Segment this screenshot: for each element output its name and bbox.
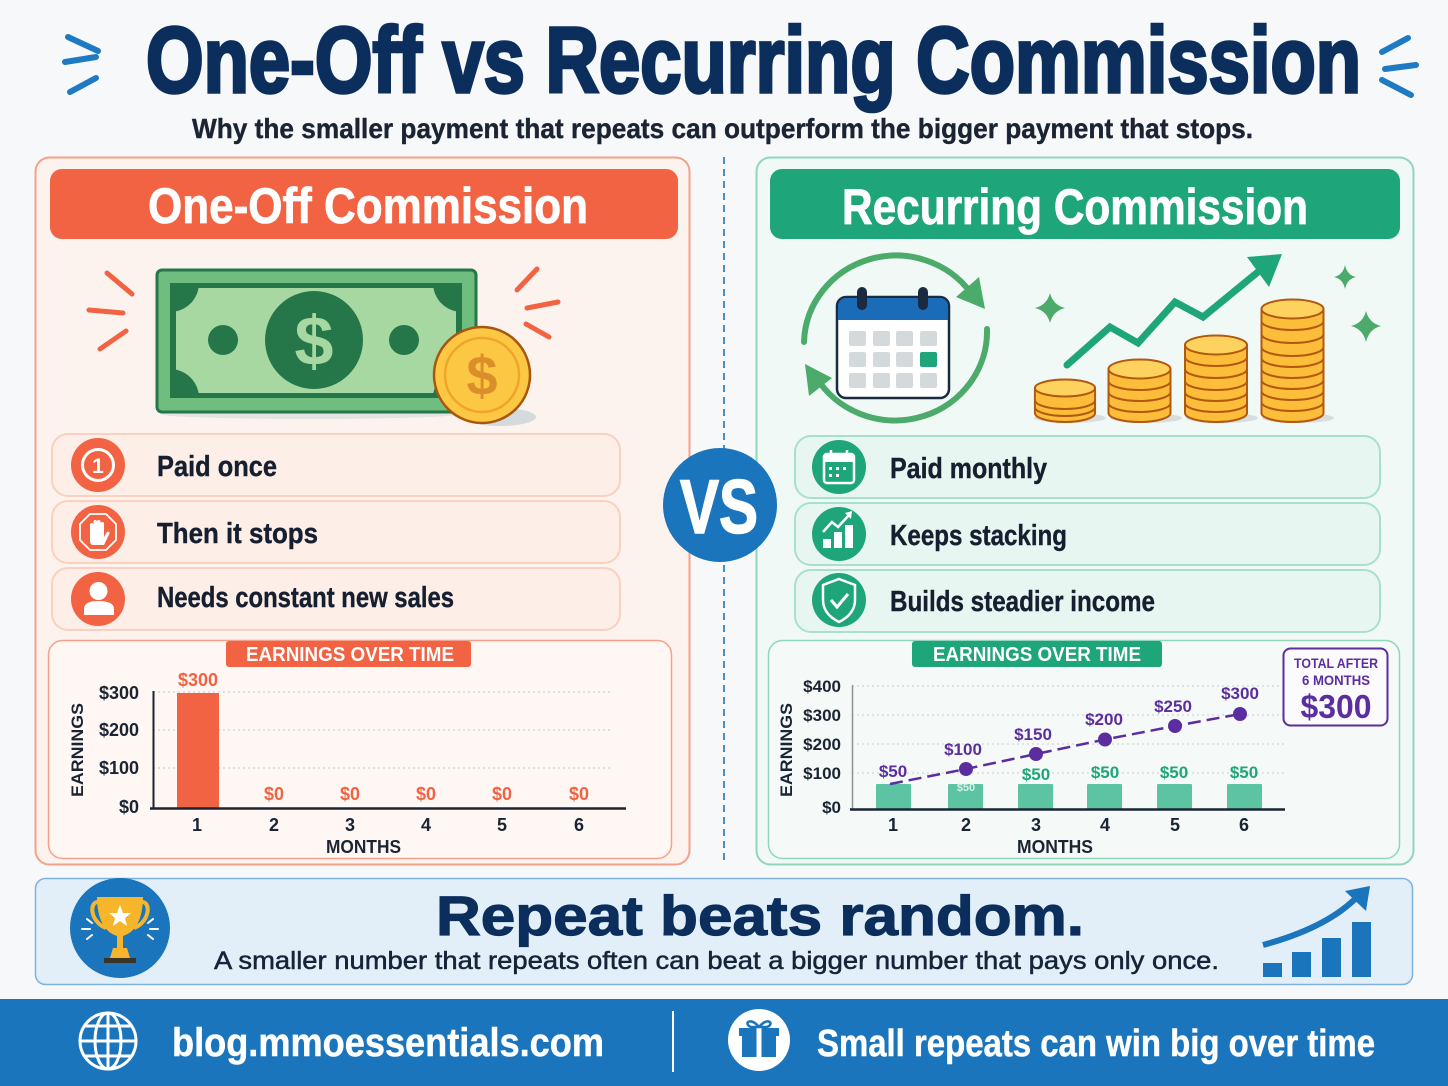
icon: number one bbox=[71, 438, 125, 492]
icon: banknote bbox=[156, 268, 478, 419]
item: then it stops: Then it stops bbox=[157, 518, 318, 550]
item: needs constant new sales: Needs constant new sales bbox=[157, 582, 454, 614]
bar chart: one-off earnings: $0 bbox=[569, 784, 589, 804]
combo chart: recurring earnings: $50 bbox=[879, 762, 907, 781]
icon: trophy bbox=[70, 878, 170, 978]
coin stack 3 bbox=[1185, 336, 1247, 422]
chart heading: EARNINGS OVER TIME bbox=[933, 644, 1141, 666]
bar chart: one-off earnings: $200 bbox=[99, 720, 139, 740]
footer tagline: Small repeats can win big over time bbox=[817, 1023, 1375, 1065]
icon: banknote: $ bbox=[295, 302, 333, 380]
combo chart: recurring earnings: $50 bbox=[1022, 765, 1050, 784]
icon: right title accent bbox=[1382, 38, 1416, 95]
icon: shield bbox=[812, 573, 866, 627]
callout: total after 6 months bbox=[1284, 648, 1388, 726]
combo chart: recurring earnings: $50 bbox=[1091, 763, 1119, 782]
bar chart: one-off earnings: $300 bbox=[99, 683, 139, 703]
icon: rays left bbox=[89, 273, 132, 349]
footer url: blog.mmoessentials.com bbox=[172, 1021, 604, 1065]
item: keeps stacking bbox=[795, 503, 1380, 565]
combo chart: recurring earnings: 1 bbox=[888, 815, 898, 835]
coin stack 4 bbox=[1262, 300, 1324, 422]
combo chart: recurring earnings: $150 bbox=[1014, 725, 1052, 744]
icon: gold coin bbox=[434, 327, 536, 426]
bar chart: one-off earnings: $0 bbox=[340, 784, 360, 804]
banner: repeat beats random bbox=[36, 878, 1412, 984]
icon: calendar bbox=[812, 440, 866, 494]
combo chart: recurring earnings bbox=[768, 640, 1400, 858]
icon: rising bars bbox=[812, 507, 866, 561]
bars bbox=[876, 784, 1262, 809]
heading: one-off commission: One-Off Commission bbox=[148, 178, 588, 234]
combo chart: recurring earnings: $250 bbox=[1154, 697, 1192, 716]
cumulative line bbox=[890, 707, 1247, 784]
panel: one-off commission bbox=[36, 158, 690, 864]
combo chart: recurring earnings: $100 bbox=[803, 764, 841, 783]
bar chart: one-off earnings: $0 bbox=[416, 784, 436, 804]
bar chart: one-off earnings: 5 bbox=[497, 815, 507, 835]
icon: number one: 1 bbox=[92, 455, 104, 478]
bar chart: one-off earnings: $0 bbox=[119, 797, 139, 817]
icon: globe bbox=[80, 1013, 136, 1069]
combo chart: recurring earnings: 2 bbox=[961, 815, 971, 835]
combo chart: recurring earnings: 5 bbox=[1170, 815, 1180, 835]
item: builds steadier income bbox=[795, 570, 1380, 632]
callout: total after 6 months: 6 MONTHS bbox=[1302, 672, 1370, 688]
icon: left title accent bbox=[65, 37, 98, 92]
icon: growth arrow bbox=[1067, 254, 1282, 365]
icon: person bbox=[71, 572, 125, 626]
combo chart: recurring earnings: $100 bbox=[944, 740, 982, 759]
banner heading: Repeat beats random. bbox=[436, 884, 1084, 947]
icon: growth bars bbox=[1263, 886, 1371, 977]
banner text: A smaller number that repeats often can beat a bigger number that pays only once. bbox=[214, 947, 1219, 975]
combo chart: recurring earnings: $50 bbox=[957, 782, 975, 794]
combo chart: recurring earnings: $0 bbox=[822, 798, 841, 817]
combo chart: recurring earnings: $50 bbox=[1160, 763, 1188, 782]
bar chart: one-off earnings: MONTHS bbox=[326, 837, 401, 857]
bar chart: one-off earnings: 4 bbox=[421, 815, 431, 835]
item: builds steadier income: Builds steadier income bbox=[890, 586, 1155, 618]
combo chart: recurring earnings: $400 bbox=[803, 677, 841, 696]
icon: gold coin: $ bbox=[466, 344, 498, 407]
icon: gift bbox=[728, 1009, 790, 1071]
axis title: EARNINGS bbox=[777, 703, 796, 797]
heading: recurring commission bbox=[770, 169, 1400, 239]
chart heading: EARNINGS OVER TIME bbox=[246, 644, 454, 666]
item: paid once: Paid once bbox=[157, 451, 277, 483]
badge: VS: VS bbox=[680, 465, 758, 550]
item: keeps stacking: Keeps stacking bbox=[890, 520, 1067, 552]
icon: stop hand bbox=[71, 505, 125, 559]
heading: recurring commission: Recurring Commission bbox=[842, 179, 1308, 235]
divider bbox=[723, 157, 725, 865]
bar chart: one-off earnings: 3 bbox=[345, 815, 355, 835]
item: paid monthly: Paid monthly bbox=[890, 453, 1047, 485]
item: paid once bbox=[52, 434, 620, 496]
bar chart: one-off earnings: $100 bbox=[99, 758, 139, 778]
icon: rays right bbox=[517, 269, 558, 337]
bar chart: one-off earnings bbox=[48, 640, 672, 858]
coin stack 2 bbox=[1108, 360, 1170, 422]
callout: total after 6 months: $300 bbox=[1300, 688, 1372, 725]
badge: VS bbox=[663, 448, 777, 562]
item: needs constant new sales bbox=[52, 568, 620, 630]
combo chart: recurring earnings: 6 bbox=[1239, 815, 1249, 835]
icon: calendar cycle bbox=[804, 255, 987, 421]
footer bbox=[0, 999, 1448, 1086]
combo chart: recurring earnings: MONTHS bbox=[1017, 837, 1093, 857]
bar chart: one-off earnings: $0 bbox=[492, 784, 512, 804]
icon: coin stacks bbox=[1034, 300, 1334, 423]
combo chart: recurring earnings: 4 bbox=[1100, 815, 1110, 835]
item: then it stops bbox=[52, 501, 620, 563]
bar chart: one-off earnings: $0 bbox=[264, 784, 284, 804]
item: paid monthly bbox=[795, 436, 1380, 498]
bar chart: one-off earnings: 2 bbox=[269, 815, 279, 835]
combo chart: recurring earnings: $300 bbox=[1221, 684, 1259, 703]
combo chart: recurring earnings: $300 bbox=[803, 706, 841, 725]
icon: sparkles bbox=[1035, 265, 1381, 342]
combo chart: recurring earnings: $200 bbox=[803, 735, 841, 754]
bar chart: one-off earnings: 6 bbox=[574, 815, 584, 835]
bar chart: one-off earnings: $300 bbox=[178, 670, 218, 690]
panel: recurring commission bbox=[756, 158, 1414, 864]
coin stack 1 bbox=[1035, 380, 1095, 422]
combo chart: recurring earnings: $200 bbox=[1085, 710, 1123, 729]
combo chart: recurring earnings: 3 bbox=[1031, 815, 1041, 835]
bar chart: one-off earnings: 1 bbox=[192, 815, 202, 835]
combo chart: recurring earnings: $50 bbox=[1230, 763, 1258, 782]
subtitle: Why the smaller payment that repeats can outperform the bigger payment that stops. bbox=[192, 113, 1253, 144]
heading: one-off commission bbox=[50, 169, 678, 239]
axis title: EARNINGS bbox=[68, 703, 87, 797]
callout: total after 6 months: TOTAL AFTER bbox=[1294, 655, 1378, 671]
